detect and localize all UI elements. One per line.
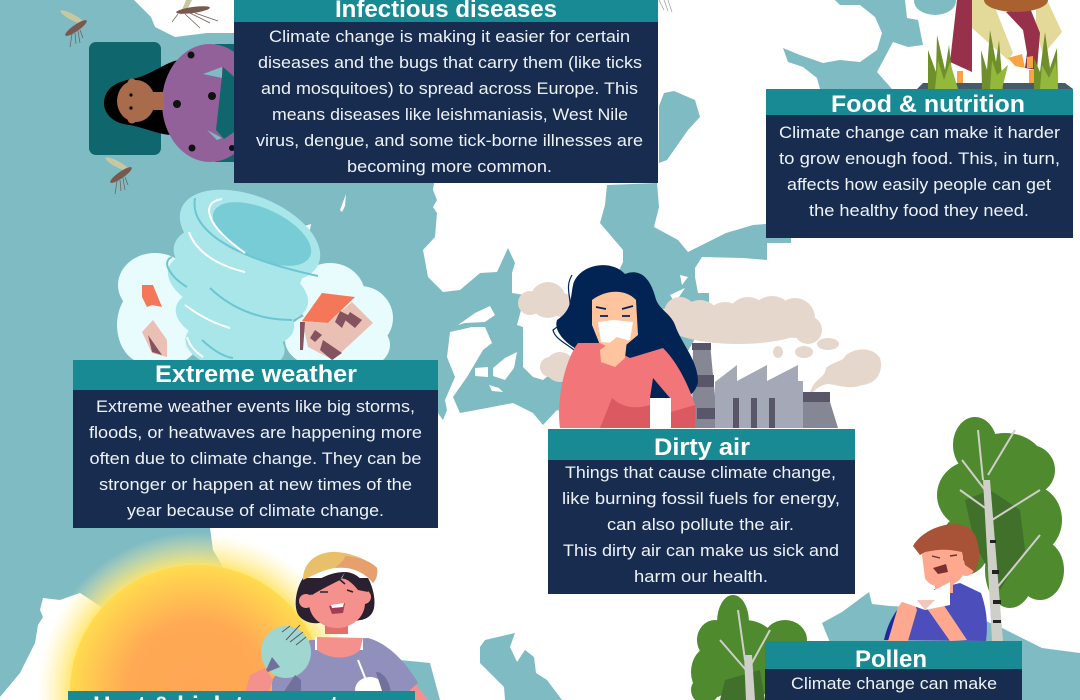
panel: heat & high temperatures: [68, 691, 415, 700]
text block: extreme weather: year because of climate change.: [127, 501, 384, 520]
illustration: birch tree left: [691, 595, 807, 700]
illustration: woman in face mask coughing: [518, 265, 698, 428]
text block: food & nutrition: [779, 123, 1060, 220]
text block: dirty air: [562, 463, 840, 586]
illustration: farmer tending crops: [917, 0, 1073, 89]
icon: mosquito top: [172, 0, 218, 28]
illustration: sneezing boy with tissue: [884, 524, 987, 641]
text block: infectious diseases: becoming more common.: [347, 157, 552, 176]
text block: pollen: Climate change can make: [791, 674, 997, 693]
text block: extreme weather: Extreme weather events like big storms,: [96, 397, 415, 416]
text block: infectious diseases: diseases and the bugs that carry them (like ticks: [258, 53, 642, 72]
illustration: tornado with flying house: [117, 171, 393, 378]
text block: food & nutrition: to grow enough food. This, in turn,: [779, 149, 1060, 168]
illustration: woman overheating with fan: [245, 552, 428, 700]
heading: food & nutrition: [766, 89, 1073, 118]
icon: mosquito lower left: [104, 155, 133, 194]
panel: dirty air: [548, 429, 855, 594]
panel: pollen: [765, 641, 1022, 700]
text block: extreme weather: stronger or happen at new times of the: [99, 475, 412, 494]
heading: extreme weather: Extreme weather: [155, 361, 357, 388]
text block: extreme weather: [89, 397, 422, 520]
text block: infectious diseases: means diseases like leishmaniasis, West Nile: [272, 105, 628, 124]
heading: infectious diseases: [234, 0, 658, 23]
text block: infectious diseases: and mosquitoes) to spread across Europe. This: [261, 79, 638, 98]
text block: dirty air: harm our health.: [634, 567, 768, 586]
illustration: sick woman lying in bed: [89, 42, 258, 162]
illustration: birch tree right: [937, 417, 1064, 641]
panel: food & nutrition: [766, 89, 1073, 238]
heading: extreme weather: [73, 360, 438, 390]
text block: infectious diseases: [256, 27, 643, 176]
heading: dirty air: Dirty air: [654, 434, 750, 461]
icon: mosquito upper left: [59, 8, 88, 47]
text block: extreme weather: often due to climate change. They can be: [90, 449, 422, 468]
text block: dirty air: can also pollute the air.: [607, 515, 794, 534]
text block: infectious diseases: Climate change is making it easier for certain: [269, 27, 630, 46]
text block: extreme weather: floods, or heatwaves are happening more: [89, 423, 422, 442]
heading: pollen: [765, 641, 1022, 673]
heading: food & nutrition: Food & nutrition: [831, 91, 1025, 118]
panel: infectious diseases: [234, 0, 658, 183]
text block: infectious diseases: virus, dengue, and some tick-borne illnesses are: [256, 131, 643, 150]
illustration: factory with smoke: [654, 296, 881, 428]
text block: food & nutrition: Climate change can make it harder: [779, 123, 1060, 142]
text block: dirty air: like burning fossil fuels for energy,: [562, 489, 840, 508]
text block: dirty air: Things that cause climate change,: [565, 463, 836, 482]
text block: food & nutrition: affects how easily people can get: [787, 175, 1051, 194]
text block: food & nutrition: the healthy food they need.: [809, 201, 1029, 220]
panel: extreme weather: [73, 360, 438, 528]
text block: dirty air: This dirty air can make us sick and: [563, 541, 839, 560]
heading: pollen: Pollen: [855, 646, 927, 673]
illustration: sun: [37, 532, 357, 700]
heading: dirty air: [548, 429, 855, 461]
